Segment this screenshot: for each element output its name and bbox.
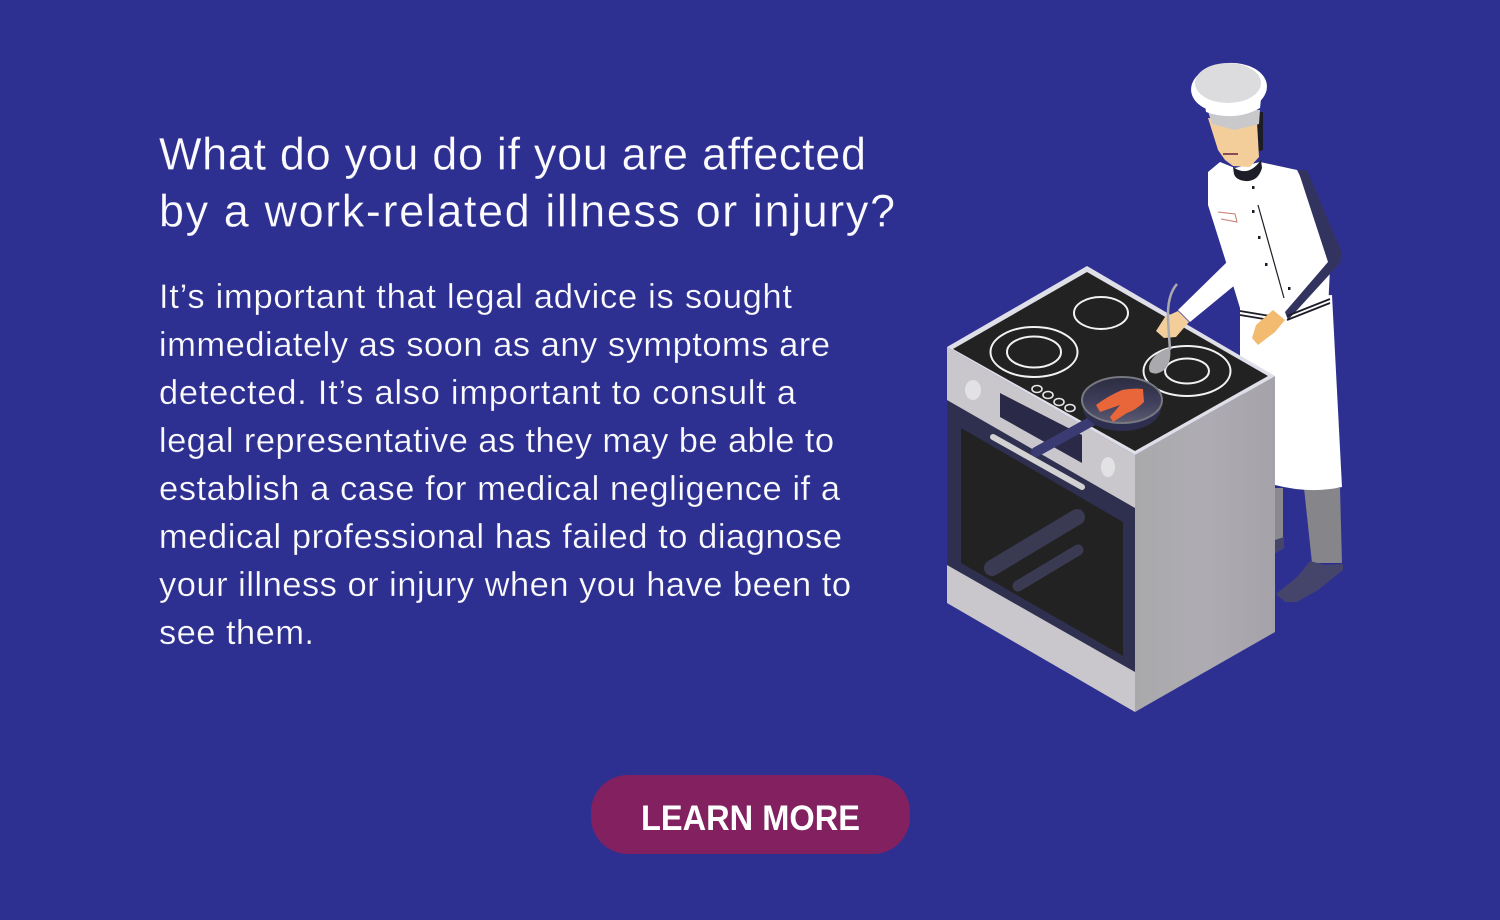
oven handle (993, 437, 1082, 487)
button: learn more (591, 775, 910, 854)
frying pan (1036, 377, 1162, 452)
jacket collar (1233, 160, 1262, 181)
button: learn more: LEARN MORE (641, 799, 860, 838)
title: by a work-related illness or injury? (159, 186, 895, 236)
chef apron (1240, 295, 1342, 490)
burner rings (990, 297, 1230, 396)
spoon (1149, 284, 1177, 374)
stove side (1135, 376, 1275, 712)
body text: establish a case for medical negligence if a (159, 470, 841, 508)
stove front (947, 347, 1135, 712)
jacket buttons and placket (1252, 186, 1290, 298)
body text: It’s important that legal advice is sought (159, 278, 792, 316)
body text: see them. (159, 614, 314, 652)
body text: medical professional has failed to diagnose (159, 518, 842, 556)
jacket sleeve (1285, 170, 1342, 320)
stove (947, 266, 1275, 712)
chef head and hat (1189, 60, 1269, 167)
stove top edge (947, 266, 1275, 455)
body text: your illness or injury when you have been to (159, 566, 851, 604)
illustration: chef at stove (947, 60, 1343, 712)
oven door (947, 400, 1135, 672)
hob surface (953, 272, 1268, 451)
control knobs (1032, 386, 1075, 412)
name badge (1218, 212, 1237, 222)
chef other hand (1252, 310, 1285, 345)
body text: immediately as soon as any symptoms are (159, 326, 830, 364)
belt stripes (1240, 299, 1330, 320)
door reflections (992, 517, 1077, 568)
chef jacket (1208, 160, 1342, 320)
salmon (1096, 389, 1144, 422)
chef legs and shoes (1275, 488, 1343, 602)
front hotspots (965, 380, 981, 400)
display panel (1000, 393, 1082, 463)
title: What do you do if you are affected (159, 128, 866, 180)
title (159, 128, 895, 236)
chef arm and hand (1156, 262, 1235, 338)
body text: detected. It’s also important to consult a (159, 374, 797, 412)
body text: legal representative as they may be able to (159, 422, 834, 460)
body text (159, 278, 851, 652)
